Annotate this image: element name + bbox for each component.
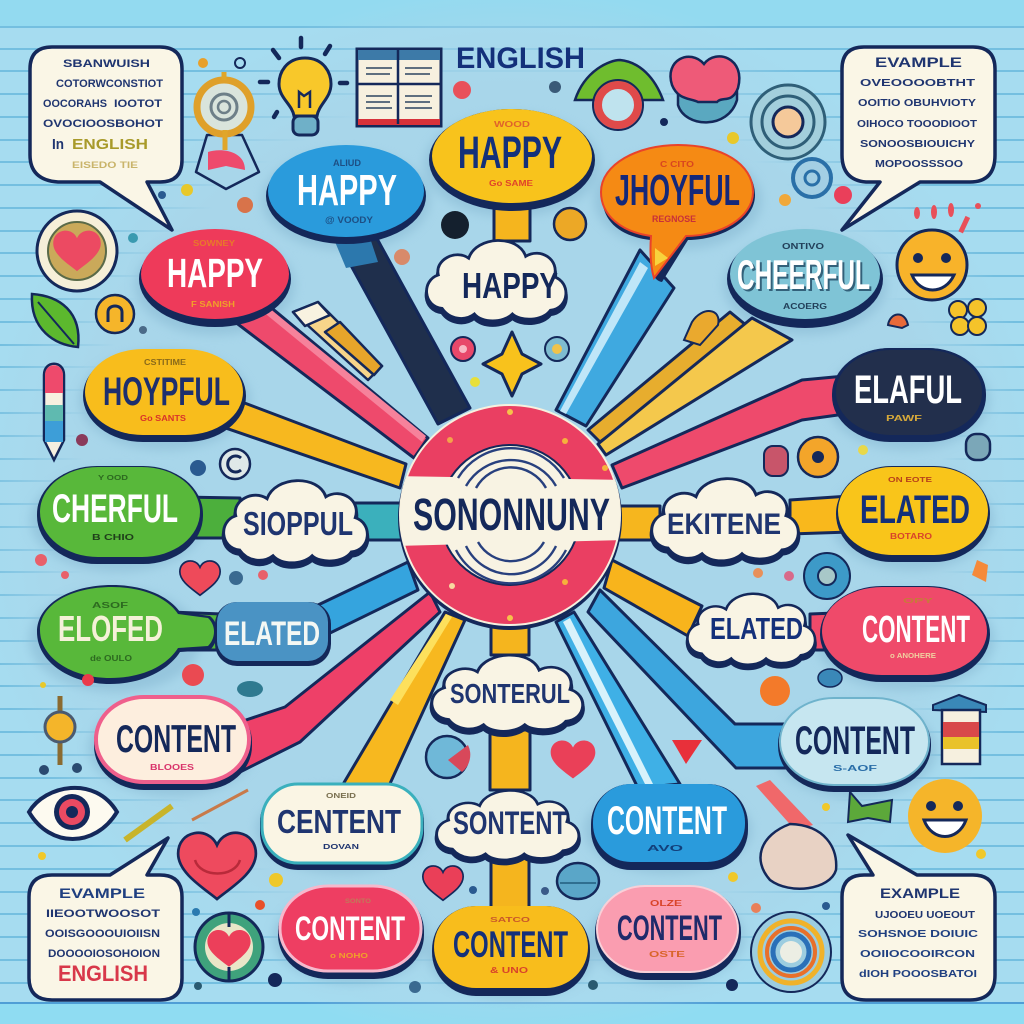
spoke: pink right (612, 376, 845, 488)
speech bubble: bottom right: SOHSNOE DOIUIC (858, 929, 978, 940)
node: crimson content: SONTO (345, 899, 371, 905)
node: red happy (139, 229, 291, 327)
node: green cherful: CHERFUL (52, 487, 178, 531)
icon: red heart center (551, 741, 595, 779)
node: red happy: HAPPY (167, 250, 263, 296)
node: cloud sioppul (224, 481, 367, 567)
node: red happy: SOWNEY (193, 239, 236, 248)
icon: yellow flower (949, 299, 986, 335)
node: cream centent: ONEID (326, 793, 356, 800)
node: dark elaful (832, 348, 986, 442)
spoke: blue up right (556, 250, 674, 426)
speech bubble: top left (30, 47, 182, 230)
hub title: SONONNUNY (413, 489, 610, 540)
node: green cherful: B CHIO (92, 533, 134, 542)
speech bubble: top left: ENGLISH (72, 136, 148, 153)
icon: book (357, 49, 441, 126)
spoke: yellow to hoyful (214, 396, 406, 488)
node: green eloted: de OULO (90, 654, 132, 663)
node: dark elaful: ELAFUL (854, 368, 962, 412)
node: yellow happy (429, 109, 595, 211)
node: crimson content: CONTENT (295, 910, 405, 948)
node: green eloted: ELOFED (58, 608, 163, 649)
speech bubble: top left: SBANWUISH (63, 58, 150, 70)
speech bubble: top right (842, 47, 995, 230)
speech bubble: top right: MOPOOSSSOO (875, 159, 963, 170)
node: teal blue elated (215, 602, 331, 666)
spoke: green to cherful (180, 497, 240, 538)
node: cloud entent (437, 791, 579, 864)
node: yellow hoyful: CSTITIME (144, 358, 187, 367)
node: orange joyful with tail: REGNOSE (652, 214, 696, 224)
icon: pink ring (451, 337, 475, 361)
node: crimson content: o NOHO (330, 953, 369, 960)
node: red content right: OPY (903, 598, 934, 605)
icon: blue feather (190, 460, 206, 476)
node: pink content: OSTE (649, 950, 686, 959)
node: blue happy: @ VOODY (325, 215, 373, 225)
icon: light bulb (260, 38, 347, 135)
node: yellow content: SATCO (490, 917, 531, 924)
icon: small c ring (220, 449, 250, 479)
node: yellow elated: ELATED (860, 488, 970, 532)
node: light blue content (778, 698, 931, 792)
speech bubble: top right: EVAMPLE (875, 54, 962, 70)
spoke: yellow right outer (790, 496, 850, 534)
speech bubble: bottom right: EXAMPLE (880, 885, 960, 901)
node: yellow content: CONTENT (453, 924, 568, 965)
node: teal cheerful: CHEERFUL (737, 251, 870, 298)
icon: heart medallion (37, 211, 117, 291)
node: light blue content: CONTENT (795, 719, 915, 763)
node: cream centent (260, 784, 424, 870)
spokes: central vertical yellow (490, 205, 530, 910)
icon: leaf (32, 294, 78, 347)
speech bubble: top right: SONOOSBIOUICHY (860, 139, 975, 150)
icon: blue lens (426, 736, 470, 778)
icon: gold blob (554, 208, 586, 240)
node: cloud sioppul: SIOPPUL (243, 505, 353, 542)
node: pink content (595, 886, 741, 980)
node: pink outlined content: CONTENT (116, 718, 236, 761)
speech bubble: top right: OOITIO OBUHVIOTY (858, 98, 976, 109)
node: green eloted (37, 585, 218, 684)
node: blue happy: ALIUD (333, 158, 362, 168)
node: yellow hoyful: Go SANTS (140, 414, 187, 423)
node: red content right: o ANOHERE (890, 653, 936, 660)
icon: pencil crayon (44, 364, 64, 460)
node: yellow content: & UNO (490, 966, 528, 975)
speech bubble: top left: EISEDO TIE (72, 160, 138, 170)
spoke: gold up right (588, 312, 792, 455)
icon: orange drop right (972, 560, 988, 582)
icon: sparkle marks around smiley (914, 203, 981, 233)
node: cloud happy (427, 240, 566, 325)
node: cloud ekitene (652, 479, 798, 565)
node: yellow hoyful: HOYPFUL (103, 370, 230, 414)
node: pink outlined content: BLOOES (150, 763, 195, 772)
node: cloud sonterul (432, 655, 583, 735)
node: yellow content (432, 906, 590, 996)
spoke: green to elated (170, 612, 222, 650)
speech bubble: bottom right: dIOH POOOSBATOI (859, 969, 977, 980)
icon: blue half circle (818, 669, 842, 687)
icon: teal shell (237, 681, 263, 697)
speech bubble: top left: In (52, 136, 64, 153)
speech bubble: top left: OOCORAHS (43, 98, 107, 110)
node: pink content: CONTENT (617, 909, 722, 948)
speech bubble: bottom left (29, 838, 182, 1000)
icon: red triangle heart (672, 740, 702, 764)
icon: teal ring right (804, 553, 850, 599)
icon: small heart bottom (423, 866, 463, 900)
central hub (395, 405, 625, 630)
node: cloud ekitene: EKITENE (667, 508, 781, 541)
node: pink content: OLZE (650, 899, 683, 908)
node: cloud elated: ELATED (710, 611, 803, 646)
node: teal cheerful: ACOERG (783, 302, 827, 311)
icon: concentric circles (751, 85, 825, 159)
node: cloud elated (687, 594, 815, 669)
node: yellow elated: ON EOTE (888, 477, 932, 484)
icon: small heart left (180, 561, 220, 595)
icon: eye (29, 788, 117, 839)
node: cloud entent: SONTENT (453, 805, 567, 841)
icon: smiley top right (897, 230, 967, 300)
node: green cherful: Y OOD (98, 475, 128, 482)
node: blue happy: HAPPY (297, 166, 397, 215)
icon: blue swirl and red dot (793, 159, 852, 204)
icon: small box right (933, 695, 986, 764)
icon: black blob (441, 211, 469, 239)
icon: gold ring right (798, 437, 838, 477)
speech bubble: bottom right: OOIIOCOOIRCON (860, 949, 975, 960)
speech bubble: top right: OIHOCO TOOODIOOT (857, 119, 977, 130)
heading: english: ENGLISH (456, 42, 585, 75)
spoke: red to content right (810, 612, 860, 650)
node: yellow happy: WOOD (494, 120, 530, 129)
speech bubble: bottom left: ENGLISH (58, 961, 148, 986)
node: cloud happy: HAPPY (462, 265, 558, 306)
spoke: blue to content lower right (588, 590, 790, 768)
icon: heart disc (195, 913, 263, 981)
speech bubble: top left: OVOCIOOSBOHOT (43, 118, 163, 130)
node: blue content: CONTENT (607, 799, 727, 843)
node: red happy: F SANISH (191, 300, 235, 309)
icon: yellow twig (125, 790, 248, 840)
icon: rainbow circle (751, 912, 831, 992)
node: crimson content (278, 886, 424, 979)
spoke: teal to sioppul (352, 503, 402, 540)
speech bubble: bottom right: UJOOEU UOEOUT (875, 910, 975, 921)
node: yellow happy: HAPPY (458, 127, 562, 178)
speech bubble: bottom left: EVAMPLE (59, 885, 145, 901)
node: blue happy (266, 145, 426, 244)
spoke: blue to content bottom (556, 612, 680, 788)
icon: red marker (82, 674, 94, 686)
speech bubble: bottom left: OOISGOOOUIOIISN (45, 928, 160, 940)
spokes connecting the hub to the nodes (170, 205, 860, 910)
node: cream centent: CENTENT (277, 803, 401, 840)
speech bubble: top left: IOOTOT (114, 98, 162, 110)
node: blue content: AVO (647, 844, 683, 853)
spoke: yellow lower left (342, 612, 465, 788)
icon: large heart (178, 833, 256, 899)
icon: pencil in the middle (293, 302, 382, 380)
icon: orange bag (888, 314, 908, 328)
node: green cherful (37, 466, 203, 564)
node: cloud sonterul: SONTERUL (450, 678, 570, 709)
spoke: pink to red happy (222, 300, 428, 458)
spoke: yellow right inner (618, 506, 660, 540)
node: orange joyful with tail (601, 145, 755, 282)
node: yellow happy: Go SAME (489, 179, 534, 188)
speech bubble: top right: OVEOOOOBTHT (860, 78, 975, 89)
icon: green arch with ring (575, 60, 663, 130)
icon: small teal ring (545, 337, 569, 361)
icon: grey blob right (966, 434, 990, 460)
icon: blue lips (557, 863, 599, 899)
node: dark elaful: PAWF (886, 414, 922, 423)
icon: pink flower bowl (671, 56, 739, 122)
node: orange joyful with tail: C CITO (660, 160, 694, 169)
node: teal cheerful: ONTIVO (782, 242, 824, 251)
speech bubble: bottom left: DOOOOIOSOHOION (48, 948, 160, 960)
node: orange joyful with tail: JHOYFUL (615, 166, 740, 215)
node: pink outlined content (94, 697, 252, 790)
icon: smiley bottom right (908, 779, 982, 853)
spoke: dark to blue happy (326, 215, 470, 424)
node: yellow elated: BOTARO (890, 532, 932, 541)
icon: orange blob (760, 676, 790, 706)
spoke: yellow lower right (604, 560, 702, 636)
icon: gold coin (96, 295, 134, 333)
node: green eloted: ASOF (92, 601, 128, 610)
icon: gold star (483, 332, 541, 396)
node: blue content (591, 784, 748, 870)
icon: golden lantern (45, 696, 75, 765)
speech bubble: top left: COTORWCONSTIOT (56, 78, 163, 90)
icon: swirl magnifier (196, 72, 259, 189)
speech bubble: bottom left: IIEOOTWOOSOT (46, 908, 160, 920)
node: red content right (820, 586, 990, 682)
icon: red dot left (182, 664, 204, 686)
node: light blue content: S-AOF (833, 764, 877, 773)
node: yellow hoyful (83, 349, 246, 442)
icon: red jar (764, 446, 788, 476)
node: cream centent: DOVAN (323, 844, 359, 851)
node: teal blue elated: ELATED (224, 615, 320, 653)
spoke: red to content (240, 592, 440, 772)
node: teal cheerful (727, 229, 883, 328)
icon: green sprig (848, 792, 892, 822)
icon: gold pencil blob (684, 311, 719, 345)
node: yellow elated (836, 466, 990, 562)
node: teal cheerful: CHEERFUL (739, 253, 872, 300)
icon: hand blob (756, 780, 836, 889)
spoke: blue to elated (318, 562, 418, 635)
speech bubble: bottom right (842, 835, 995, 1000)
